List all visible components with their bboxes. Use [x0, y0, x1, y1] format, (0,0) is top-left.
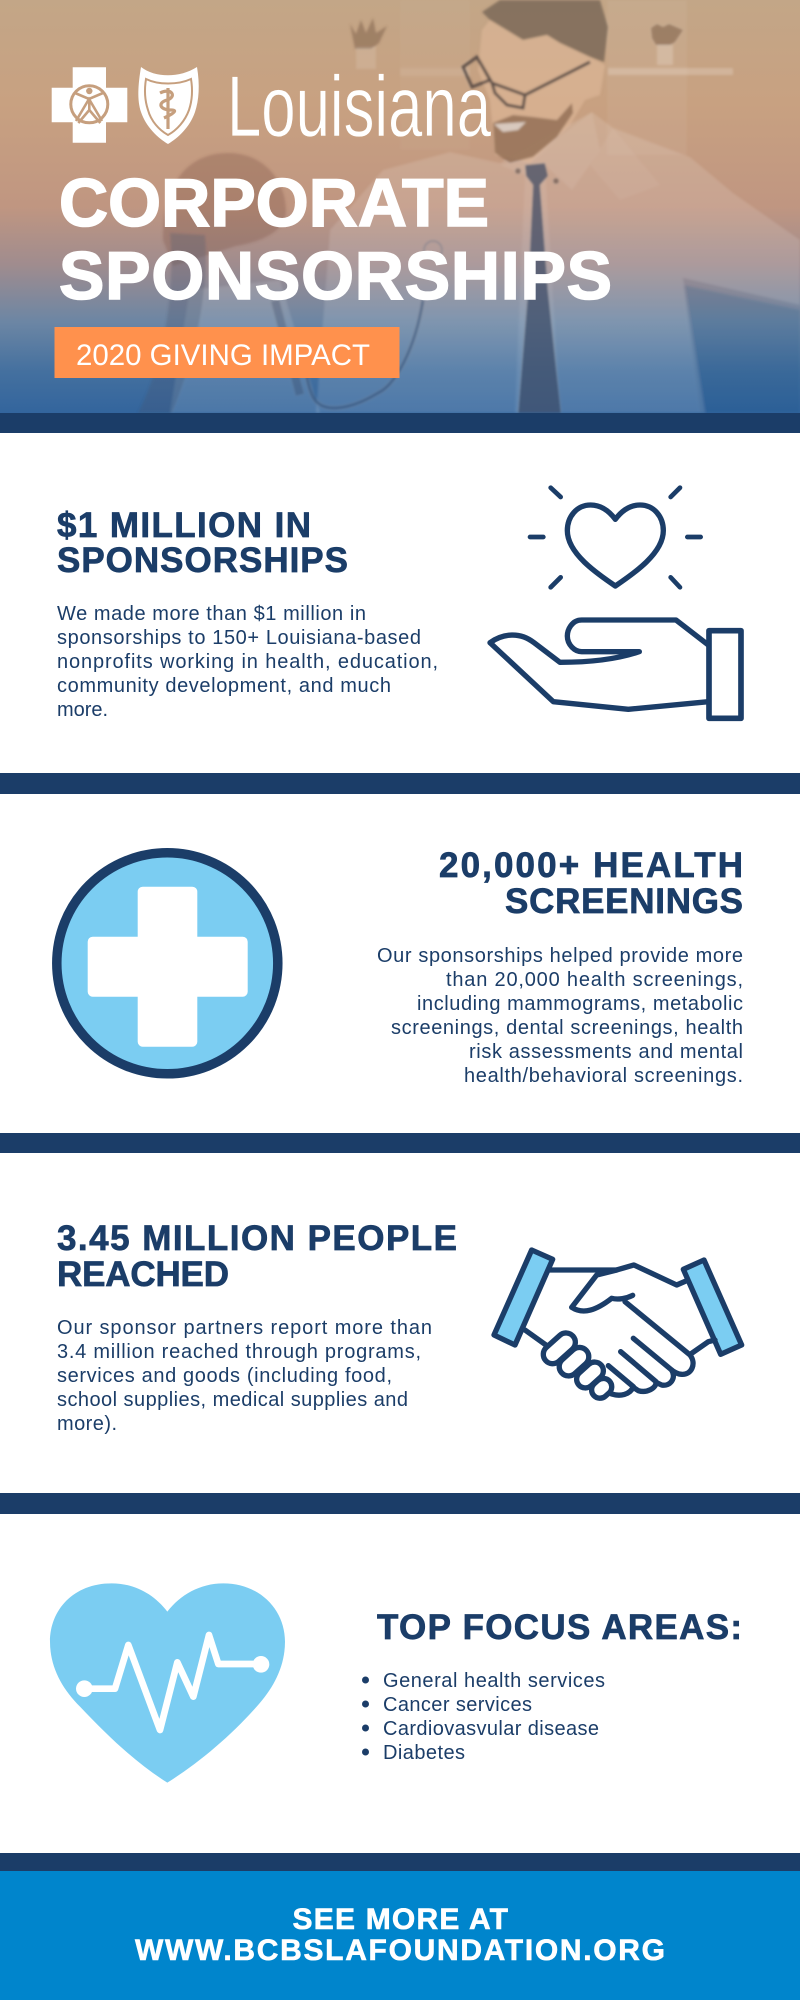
divider band — [0, 1853, 800, 1872]
text block: sponsorships: more. — [57, 699, 108, 721]
text block: sponsorships: nonprofits working in health, education, — [57, 651, 438, 673]
heading: $1 million: $1 MILLION IN — [57, 506, 311, 545]
divider band — [0, 1493, 800, 1514]
logo: cross and shield Louisiana — [52, 59, 491, 155]
text block: sponsorships: sponsorships to 150+ Louisiana-based — [57, 627, 421, 649]
heading: health screenings: 20,000+ HEALTH — [439, 846, 743, 885]
text block: people reached: Our sponsor partners report more than — [57, 1317, 432, 1339]
icon: heart with pulse line — [50, 1583, 285, 1783]
panel: header photo — [0, 0, 800, 413]
subtitle badge — [54, 327, 400, 378]
icon: medical cross circle — [57, 853, 278, 1074]
text block: screenings: Our sponsorships helped provide more — [377, 945, 743, 967]
subtitle badge: 2020 GIVING IMPACT — [76, 339, 370, 372]
text block: sponsorships: community development, and much — [57, 675, 391, 697]
text block: people reached: school supplies, medical supplies and — [57, 1389, 408, 1411]
logo wordmark: Louisiana — [227, 59, 491, 155]
panel: footer — [0, 1871, 800, 2000]
text block: screenings: screenings, dental screenings, health — [391, 1017, 743, 1039]
text block: people reached — [57, 1317, 432, 1435]
list: focus areas: General health services — [383, 1670, 605, 1692]
text block: screenings: including mammograms, metabolic — [417, 993, 743, 1015]
icon: handshake — [494, 1250, 742, 1402]
icon: shield — [138, 67, 199, 144]
list: focus areas: Diabetes — [383, 1742, 465, 1764]
title — [59, 165, 612, 314]
panel: people reached — [57, 1219, 742, 1435]
text block: sponsorships: We made more than $1 million in — [57, 603, 366, 625]
text block: people reached: 3.4 million reached through programs, — [57, 1341, 421, 1363]
divider band — [0, 1133, 800, 1153]
panel: top focus areas — [50, 1583, 742, 1783]
heading: health screenings — [439, 846, 743, 921]
heading: $1 million: SPONSORSHIPS — [57, 541, 348, 580]
icon: hand holding heart — [490, 488, 741, 718]
text block: screenings — [377, 945, 743, 1087]
text block: screenings: health/behavioral screenings. — [464, 1065, 743, 1087]
divider band — [0, 773, 800, 794]
heading: people reached — [57, 1219, 457, 1294]
heading: $1 million — [57, 506, 348, 580]
footer text — [135, 1903, 665, 1967]
list: focus areas: Cardiovasvular disease — [383, 1718, 599, 1740]
title: SPONSORSHIPS — [59, 238, 612, 314]
heading: people reached: 3.45 MILLION PEOPLE — [57, 1219, 457, 1258]
list: focus areas — [362, 1670, 605, 1764]
text block: screenings: risk assessments and mental — [469, 1041, 743, 1063]
text block: people reached: services and goods (including food, — [57, 1365, 392, 1387]
icon: cross — [52, 67, 127, 143]
heading: people reached: REACHED — [57, 1255, 229, 1294]
text block: people reached: more). — [57, 1413, 117, 1435]
footer text: SEE MORE AT — [292, 1903, 508, 1936]
footer text: WWW.BCBSLAFOUNDATION.ORG — [135, 1934, 665, 1967]
text block: sponsorships — [57, 603, 438, 721]
list: focus areas: Cancer services — [383, 1694, 532, 1716]
panel: sponsorships — [57, 488, 741, 721]
heading: top focus areas: TOP FOCUS AREAS: — [377, 1608, 742, 1647]
title: CORPORATE — [59, 165, 489, 241]
heading: health screenings: SCREENINGS — [505, 882, 743, 921]
panel: health screenings — [57, 846, 743, 1087]
text block: screenings: than 20,000 health screenings, — [446, 969, 743, 991]
divider band — [0, 413, 800, 433]
